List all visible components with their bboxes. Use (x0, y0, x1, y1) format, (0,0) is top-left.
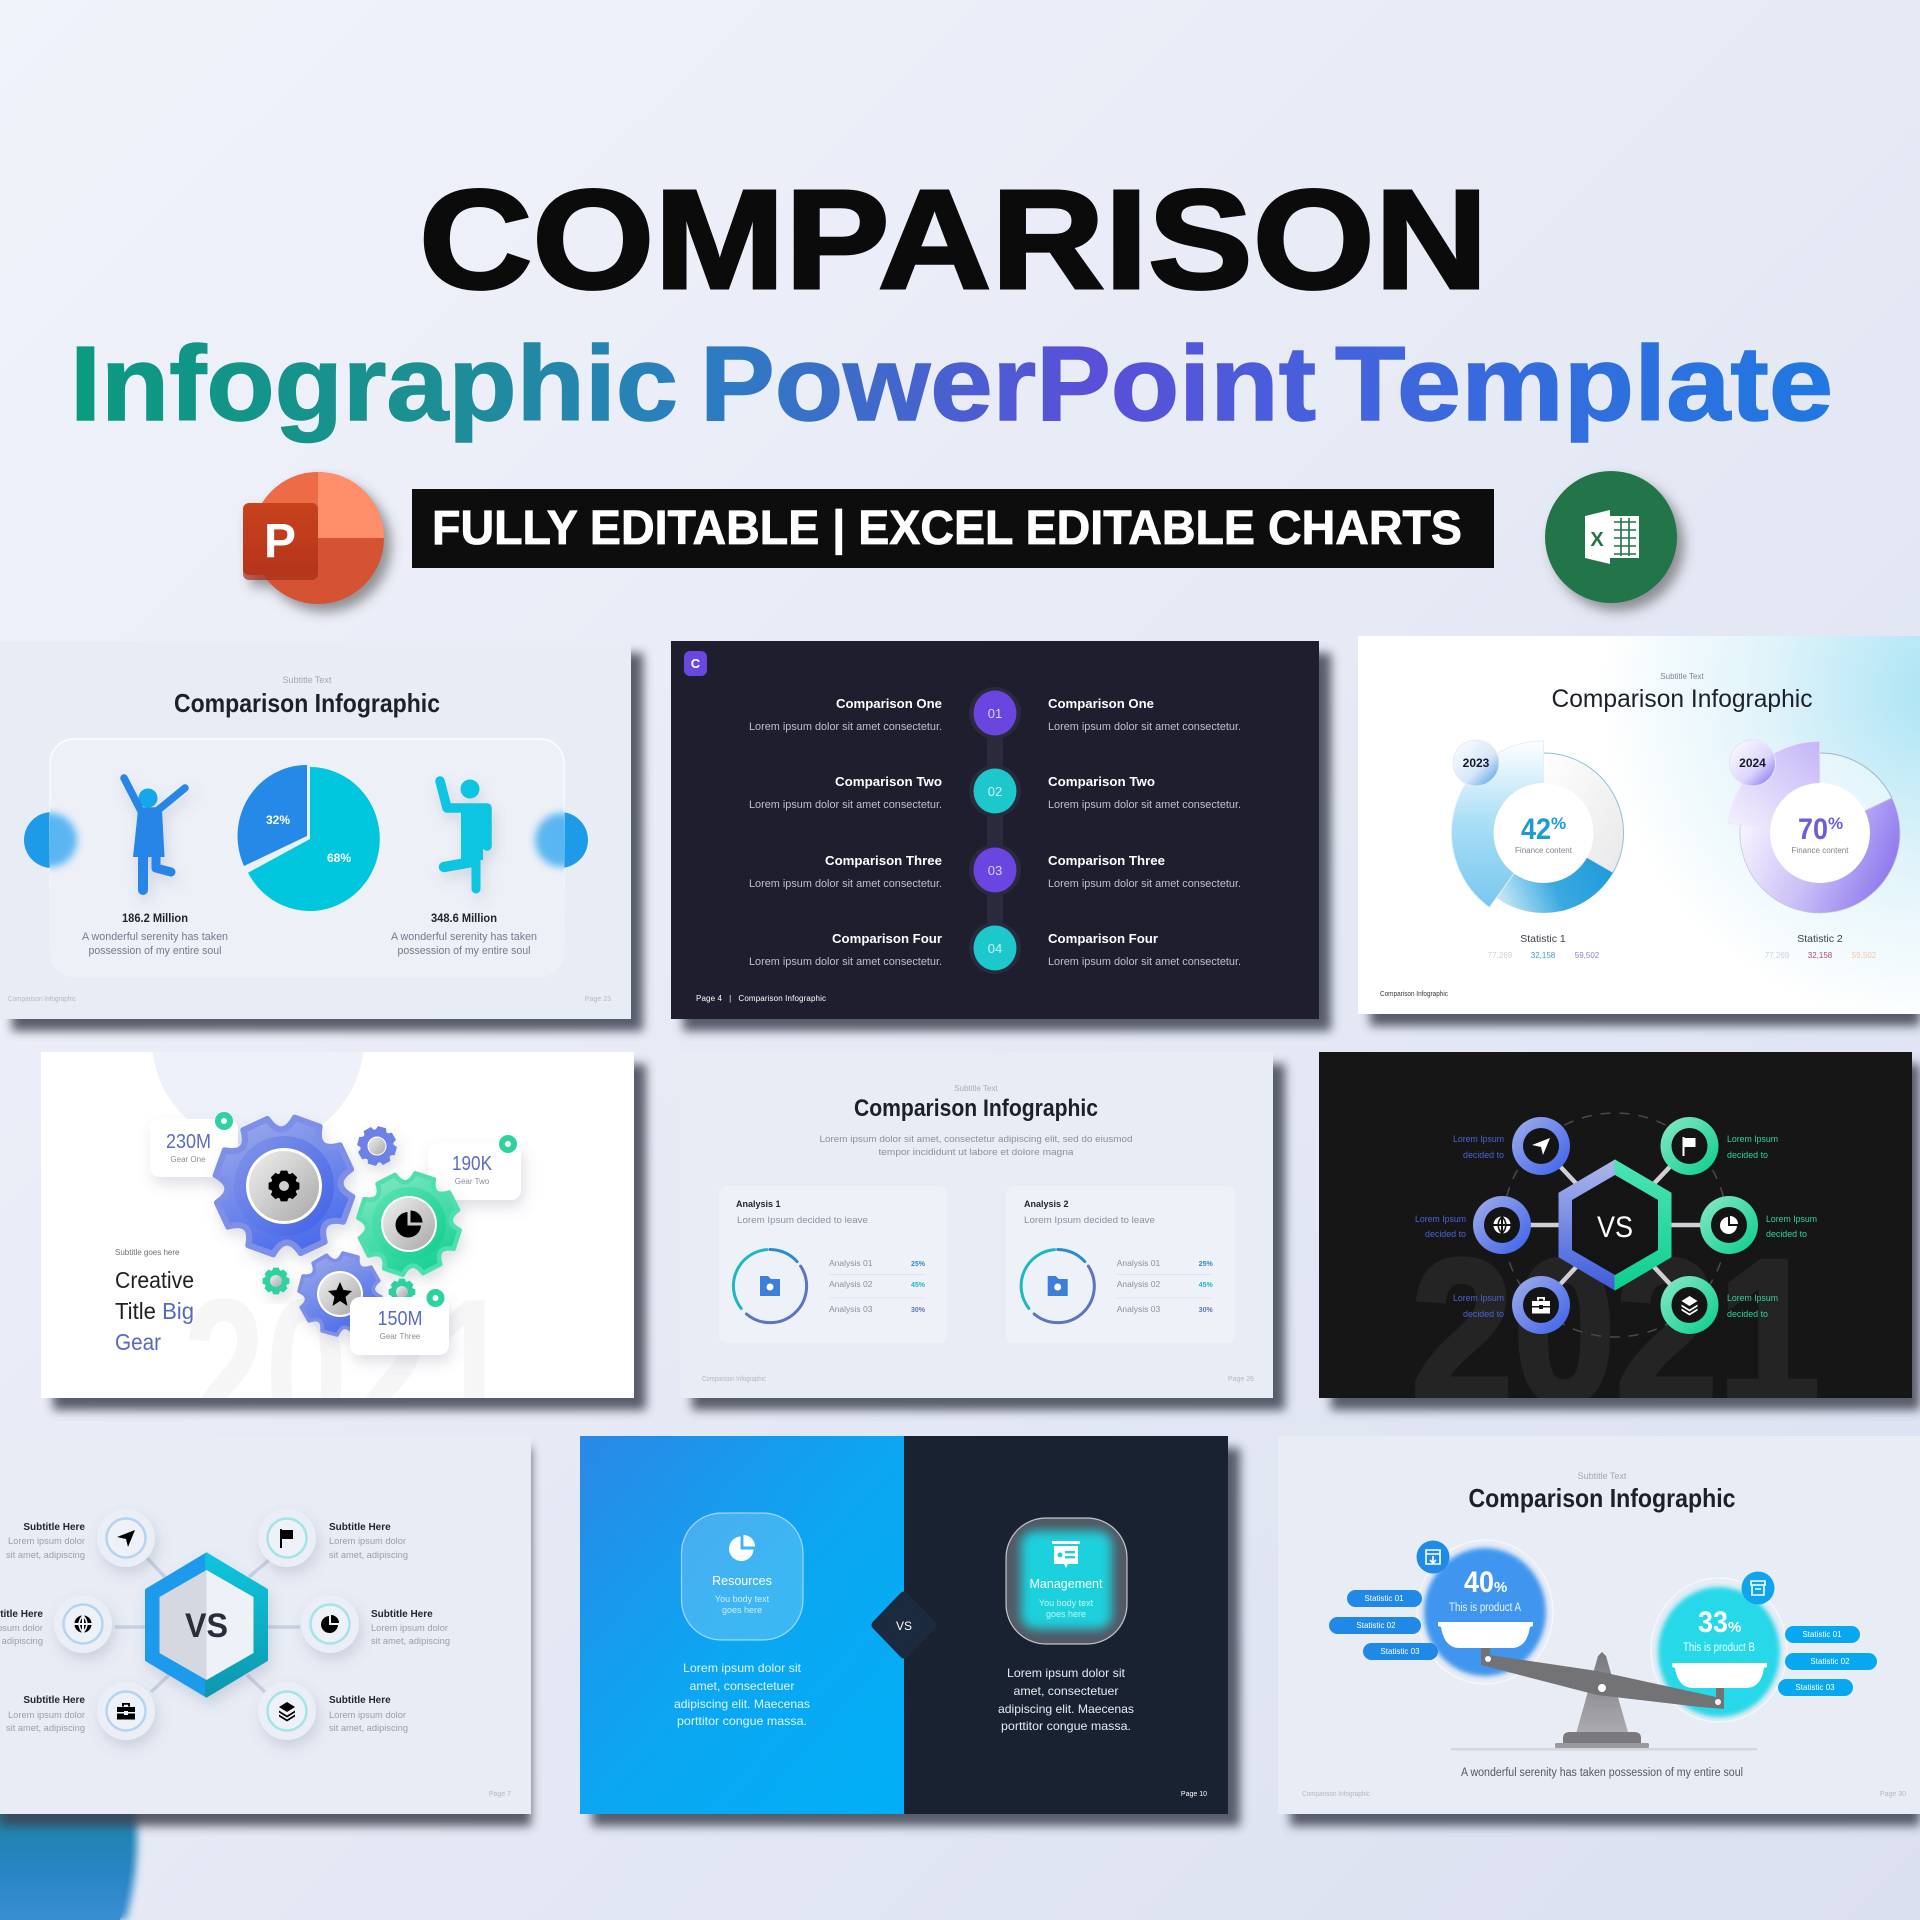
chart: donut 2023 (1452, 740, 1624, 913)
icon: Excel logo (1545, 471, 1677, 603)
card: 150M: Gear Three (380, 1332, 421, 1341)
left labels: sit amet, adipiscing (6, 1550, 85, 1560)
right labels (329, 1522, 450, 1733)
right stat text: A wonderful serenity has taken (391, 931, 537, 943)
right labels: Lorem ipsum dolor (371, 1623, 448, 1633)
card: 190K: Gear Two (455, 1177, 490, 1186)
right labels: decided to (1727, 1309, 1768, 1320)
chart: donut 2024: % (1828, 814, 1843, 833)
slide 4 title block: Gear (115, 1329, 161, 1355)
slide 1 footer: Page 23 (585, 996, 611, 1003)
management body text: porttitor congue massa. (1001, 1719, 1131, 1733)
node: flag (1660, 1117, 1718, 1175)
left text column: Comparison Three (825, 853, 942, 868)
figure: man (440, 780, 487, 889)
card: resources: goes here (722, 1605, 762, 1615)
subtitle: Infographic PowerPoint Template (70, 325, 1833, 443)
product B circle: 33 (1698, 1606, 1728, 1639)
resources body text: amet, consectetuer (690, 1679, 794, 1693)
rows 2: 25% (1199, 1261, 1213, 1268)
card: management: Management (1030, 1577, 1103, 1591)
product B circle: This is product B (1683, 1642, 1755, 1654)
slide 5 footer: Comparison Infographic (702, 1376, 766, 1383)
card: analysis 1 (719, 1186, 947, 1343)
slide 9 footer (1302, 1791, 1906, 1798)
rows 2: 45% (1199, 1282, 1213, 1289)
hexagon VS (146, 1554, 266, 1696)
right labels: Lorem Ipsum (1727, 1293, 1778, 1304)
slide 3 heading: Comparison Infographic (1552, 685, 1812, 713)
gear: small green left (263, 1268, 289, 1294)
left labels: Lorem Ipsum (1453, 1293, 1504, 1304)
icon badge A (1416, 1540, 1450, 1574)
slide 9 footer: Page 30 (1880, 1791, 1906, 1798)
balance scale (1451, 1648, 1757, 1750)
VS diamond: VS (896, 1619, 912, 1633)
statistic pills left: Statistic 01 (1364, 1594, 1404, 1603)
rows 1 (829, 1258, 926, 1314)
card: 230M (150, 1112, 238, 1177)
product A circle (1417, 1540, 1553, 1684)
slide 5 footer: Page 26 (1228, 1376, 1254, 1383)
right text column: Comparison Four (1048, 931, 1158, 946)
left labels: Lorem Ipsum (1415, 1214, 1466, 1225)
panel: slide 4 gears (41, 1052, 654, 1418)
left labels: Lorem ipsum dolor (8, 1710, 85, 1720)
right stat text: possession of my entire soul (398, 945, 530, 957)
connector spine (969, 687, 1021, 974)
product A circle: This is product A (1449, 1602, 1521, 1614)
logo badge: C (691, 656, 701, 671)
statistic 2 values: Statistic 2 (1797, 933, 1843, 945)
card: management (1006, 1518, 1127, 1644)
logo badge (684, 651, 707, 676)
statistic pills right: Statistic 01 (1802, 1630, 1842, 1639)
right text column: Lorem ipsum dolor sit amet consectetur. (1048, 878, 1241, 890)
node: pie (301, 1595, 359, 1653)
slide 4 title block: Title Big (115, 1298, 194, 1324)
node: globe (1473, 1196, 1531, 1254)
statistic 2 values: 32,158 (1808, 951, 1833, 960)
right stat text (391, 911, 537, 957)
subtitle: Infographic PowerPoint Template: PowerPoint (700, 325, 1316, 443)
left labels: Lorem Ipsum (1453, 1134, 1504, 1145)
rows 1: 30% (911, 1307, 926, 1314)
slide 5 intro text (820, 1134, 1132, 1158)
node: briefcase (1512, 1276, 1570, 1334)
VS diamond (876, 1596, 932, 1654)
card: analysis 2: Analysis 2 (1024, 1199, 1069, 1209)
right text column: Lorem ipsum dolor sit amet consectetur. (1048, 799, 1241, 811)
number circle 02 (974, 768, 1016, 814)
slide 8 page number: Page 10 (1181, 1791, 1207, 1798)
slide 5 intro text: Lorem ipsum dolor sit amet, consectetur adipiscing elit, sed do eiusmod (820, 1134, 1132, 1145)
panel: slide 2 dark timeline (671, 641, 1331, 1031)
rows 1: Analysis 02 (829, 1279, 873, 1289)
subtitle: Infographic PowerPoint Template: Infographic (70, 325, 678, 443)
figure: woman (124, 778, 185, 890)
backdrop circle and 2021: 2021 (183, 1255, 512, 1490)
card: resources (682, 1513, 803, 1640)
node: layers (258, 1682, 316, 1740)
right labels: Lorem ipsum dolor (329, 1536, 406, 1546)
ring chart 2 (1021, 1250, 1094, 1323)
right text column (1048, 696, 1241, 968)
card: analysis 1: Analysis 1 (736, 1199, 781, 1209)
gear: lower blue (291, 1245, 389, 1343)
chart: donut 2024: 70 (1798, 813, 1828, 846)
chart: pie 32 68 (238, 765, 380, 911)
number circle 03: 03 (988, 863, 1002, 878)
resources body text: porttitor congue massa. (677, 1714, 807, 1728)
card: 230M: 230M (166, 1131, 211, 1153)
dashed orbit (1503, 1113, 1727, 1337)
card: 190K (428, 1135, 521, 1200)
left text column (749, 696, 942, 968)
right labels: sit amet, adipiscing (329, 1723, 408, 1733)
right labels: Subtitle Here (329, 1522, 391, 1533)
card: analysis 2 (1006, 1186, 1235, 1343)
gear: large green (346, 1161, 472, 1287)
statistic pills left: Statistic 03 (1380, 1647, 1420, 1656)
statistic 1 values (1488, 933, 1600, 960)
panel: slide 8 resources vs management (580, 1436, 1240, 1826)
product B circle (1651, 1578, 1787, 1722)
left stat text (82, 911, 228, 957)
card: resources: Resources (712, 1574, 772, 1588)
node: layers (1660, 1276, 1718, 1334)
number circle 01 (974, 690, 1016, 736)
ring chart 1 (733, 1250, 807, 1323)
right text column: Lorem ipsum dolor sit amet consectetur. (1048, 721, 1241, 733)
slide 9 footer: Comparison Infographic (1302, 1791, 1370, 1798)
left stat text: possession of my entire soul (88, 945, 222, 957)
backdrop circle and 2021 (152, 1052, 484, 1398)
blurred semicircles (23, 813, 589, 867)
left labels: sit amet, adipiscing (6, 1723, 85, 1733)
panel: slide 9 scale (1278, 1436, 1920, 1826)
left labels: decided to (1425, 1229, 1466, 1240)
hexagon VS: VS (185, 1607, 228, 1645)
right text column: Comparison Three (1048, 853, 1165, 868)
statistic 2 values (1765, 933, 1877, 960)
slide 5 subtitle: Subtitle Text (954, 1084, 998, 1093)
right text column: Comparison Two (1048, 774, 1155, 789)
badge: fully editable: FULLY EDITABLE | EXCEL EDITABLE CHARTS (432, 502, 1462, 555)
rows 2 (1117, 1258, 1213, 1314)
chart: donut 2023: % (1551, 814, 1566, 833)
right labels: sit amet, adipiscing (371, 1636, 450, 1646)
rows 1: Analysis 01 (829, 1258, 873, 1268)
node: navigation (1512, 1117, 1570, 1175)
left labels: decided to (1463, 1309, 1504, 1320)
statistic 1 values: 32,158 (1531, 951, 1556, 960)
slide 1 heading: Comparison Infographic (174, 688, 440, 718)
product A circle: 40 (1464, 1566, 1494, 1599)
management body text (998, 1666, 1134, 1733)
statistic pills left (1329, 1590, 1438, 1660)
node: flag (258, 1509, 316, 1567)
chart: donut 2023: Finance content (1515, 846, 1573, 855)
left text column: Comparison Two (835, 774, 942, 789)
card: 150M: 150M (378, 1308, 422, 1330)
panel: slide 3 donut comparison (1358, 636, 1920, 1026)
number circle 03 (974, 848, 1016, 892)
statistic 2 values: 59,502 (1852, 951, 1877, 960)
management body text: Lorem ipsum dolor sit (1007, 1666, 1126, 1680)
product A circle: % (1494, 1579, 1507, 1596)
slide 4 title block: Creative (115, 1267, 194, 1293)
left text column: Lorem ipsum dolor sit amet consectetur. (749, 721, 942, 733)
number circle 04 (974, 926, 1016, 970)
slide 4 title block (115, 1248, 194, 1355)
statistic 2 values: 77,269 (1765, 951, 1790, 960)
statistic pills right (1778, 1626, 1877, 1696)
right labels: Lorem Ipsum (1766, 1214, 1817, 1225)
right labels: Subtitle Here (371, 1609, 433, 1620)
chart: pie 32 68: 32% (266, 813, 290, 827)
right stat text: 348.6 Million (431, 911, 497, 925)
slide 3 subtitle: Subtitle Text (1660, 672, 1704, 681)
number circle 01: 01 (988, 706, 1002, 721)
panel: slide 5 analysis (680, 1052, 1285, 1410)
management body text: adipiscing elit. Maecenas (998, 1702, 1134, 1716)
chart: donut 2023: 2023 (1463, 756, 1490, 770)
left text column: Lorem ipsum dolor sit amet consectetur. (749, 799, 942, 811)
left text column: Comparison One (836, 696, 942, 711)
statistic pills right: Statistic 03 (1795, 1683, 1835, 1692)
right labels: Lorem Ipsum (1727, 1134, 1778, 1145)
badge: fully editable (412, 489, 1494, 568)
resources body text: adipiscing elit. Maecenas (674, 1697, 810, 1711)
statistic pills right: Statistic 02 (1810, 1657, 1850, 1666)
chart: donut 2023: 42 (1521, 813, 1551, 846)
right labels: decided to (1766, 1229, 1807, 1240)
left labels (1415, 1134, 1504, 1320)
card: 190K: 190K (452, 1153, 493, 1175)
rows 2: Analysis 01 (1117, 1258, 1160, 1268)
card: management: goes here (1046, 1609, 1086, 1619)
statistic pills left: Statistic 02 (1356, 1621, 1396, 1630)
right labels: Subtitle Here (329, 1695, 391, 1706)
icon: PowerPoint logo: P (264, 515, 296, 568)
gear: large blue (197, 1099, 371, 1273)
rows 2: Analysis 02 (1117, 1279, 1160, 1289)
slide 1 footer (8, 996, 611, 1003)
product B circle: % (1728, 1619, 1741, 1636)
slide 2 footer: Page 4 | Comparison Infographic (696, 994, 826, 1003)
card: 230M: Gear One (170, 1155, 206, 1164)
right labels: sit amet, adipiscing (329, 1550, 408, 1560)
right text column: Comparison One (1048, 696, 1154, 711)
left stat text: A wonderful serenity has taken (82, 931, 228, 943)
node: globe (54, 1595, 112, 1653)
slide 9 subtitle: Subtitle Text (1578, 1471, 1627, 1481)
right text column: Lorem ipsum dolor sit amet consectetur. (1048, 956, 1241, 968)
rows 1: Analysis 03 (829, 1304, 873, 1314)
icon: folder 2 (1048, 1276, 1068, 1296)
management body text: amet, consectetuer (1014, 1684, 1118, 1698)
right labels: decided to (1727, 1150, 1768, 1161)
caption: A wonderful serenity has taken possession of my entire soul (1461, 1767, 1743, 1779)
right labels: Lorem ipsum dolor (329, 1710, 406, 1720)
slide 1 subtitle: Subtitle Text (283, 675, 332, 685)
card: management: You body text (1039, 1598, 1094, 1608)
statistic 1 values: 77,269 (1488, 951, 1513, 960)
title: COMPARISON: COMPARISON (419, 160, 1488, 318)
side semicircles (24, 812, 588, 868)
left labels: Subtitle Here (23, 1522, 85, 1533)
chart: donut 2024 (1728, 740, 1900, 913)
card: analysis 2: Lorem Ipsum decided to leave (1024, 1215, 1155, 1226)
icon badge B (1742, 1572, 1774, 1604)
number circle 04: 04 (988, 941, 1002, 956)
slide 9 heading: Comparison Infographic (1468, 1483, 1736, 1513)
panel: slide 7 light VS (0, 1436, 531, 1826)
slide 5 heading: Comparison Infographic (854, 1095, 1098, 1122)
rows 2: 30% (1199, 1307, 1213, 1314)
gear: small blue (354, 1123, 400, 1169)
resources body text (674, 1661, 810, 1728)
panel: slide 6 dark VS (1319, 1052, 1920, 1446)
slide 5 footer (702, 1376, 1254, 1383)
node: pie (1700, 1196, 1758, 1254)
card: 150M (350, 1289, 449, 1355)
connectors (115, 1558, 300, 1692)
right labels (1727, 1134, 1817, 1320)
icon: Excel logo: X (1590, 529, 1604, 551)
gear: small green behind card (389, 1279, 415, 1305)
rows 1: 25% (911, 1261, 926, 1268)
hexagon VS (1559, 1160, 1671, 1290)
left labels (0, 1522, 85, 1733)
panel: slide 1 pie comparison (0, 641, 643, 1031)
rows 2: Analysis 03 (1117, 1304, 1160, 1314)
chart: donut 2024: Finance content (1792, 846, 1849, 855)
chart: donut 2024: 2024 (1739, 756, 1766, 770)
resources body text: Lorem ipsum dolor sit (683, 1661, 802, 1675)
subtitle: Infographic PowerPoint Template: Template (1335, 325, 1833, 443)
node: briefcase (97, 1682, 155, 1740)
blurred blue blob bottom left (0, 1760, 137, 1920)
glass panel (50, 739, 564, 977)
icon: PowerPoint logo (243, 472, 384, 604)
slide 7 page number: Page 7 (489, 1791, 511, 1798)
left labels: Lorem ipsum dolor (8, 1536, 85, 1546)
chart: pie 32 68: 68% (327, 851, 351, 865)
card: analysis 1: Lorem Ipsum decided to leave (737, 1215, 868, 1226)
slide 3 footer: Comparison Infographic (1380, 991, 1448, 998)
icon: folder 1 (760, 1276, 780, 1296)
left text column: Lorem ipsum dolor sit amet consectetur. (749, 878, 942, 890)
left labels: Subtitle Here (23, 1695, 85, 1706)
hexagon VS: VS (1597, 1211, 1633, 1244)
slide 1 footer: Comparison Infographic (8, 996, 76, 1003)
slide 5 intro text: tempor incididunt ut labore et dolore magna (878, 1147, 1074, 1158)
watermark 2021: 2021 (1411, 1217, 1820, 1446)
rows 1: 45% (911, 1282, 926, 1289)
left stat text: 186.2 Million (122, 911, 188, 925)
statistic 1 values: Statistic 1 (1520, 933, 1566, 945)
left text column: Comparison Four (832, 931, 942, 946)
number circle 02: 02 (988, 784, 1002, 799)
connectors (1502, 1146, 1729, 1305)
slide 4 title block: Subtitle goes here (115, 1248, 180, 1257)
node: navigation (97, 1509, 155, 1567)
left text column: Lorem ipsum dolor sit amet consectetur. (749, 956, 942, 968)
card: resources: You body text (715, 1594, 770, 1604)
left labels: decided to (1463, 1150, 1504, 1161)
statistic 1 values: 59,502 (1575, 951, 1600, 960)
